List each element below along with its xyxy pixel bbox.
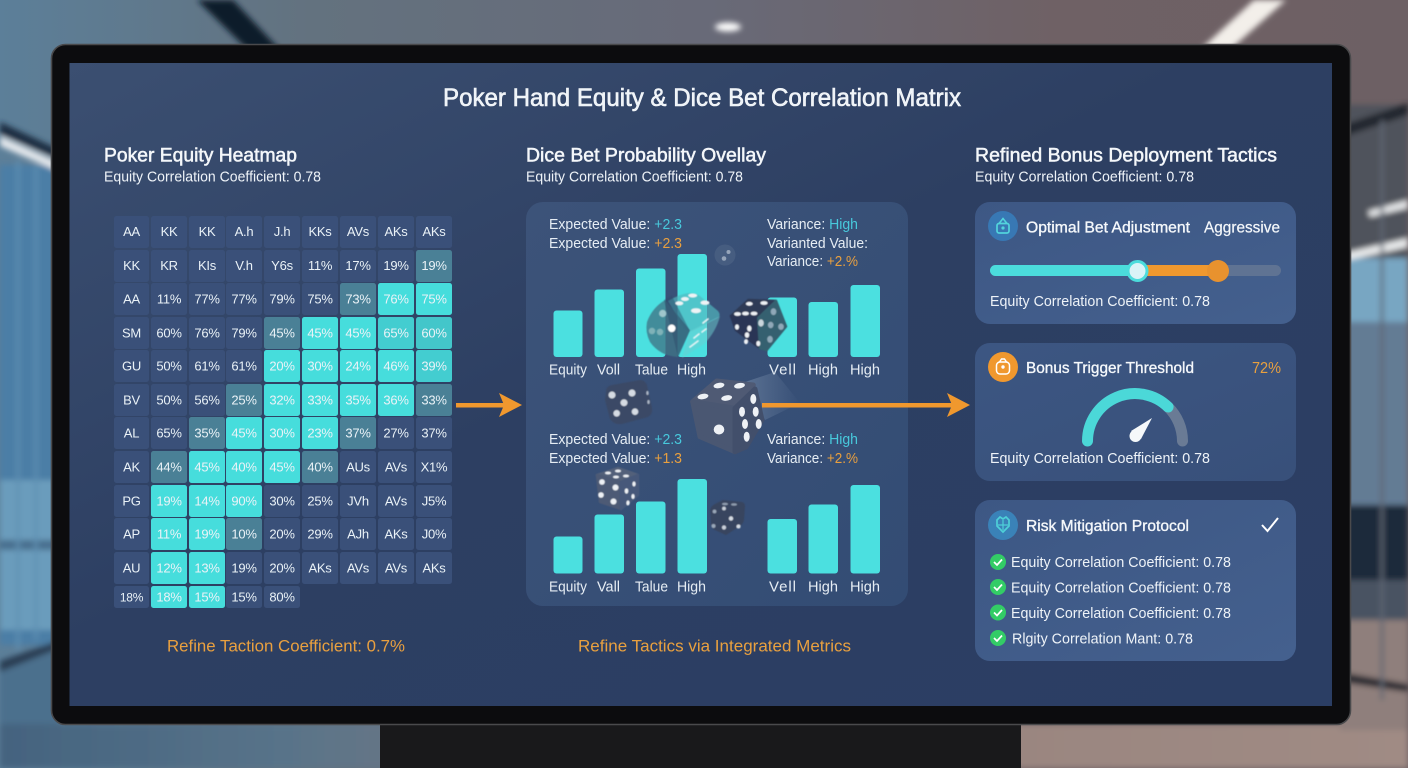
heatmap row 6: 33% — [421, 392, 447, 408]
bar chart: upper: High — [677, 362, 706, 378]
gauge — [1088, 394, 1182, 442]
heatmap row 11: AVs — [347, 560, 370, 576]
bar chart: upper: Vell — [769, 362, 796, 378]
heatmap row 6: 33% — [307, 392, 333, 408]
heatmap row 1: AVs — [347, 224, 370, 239]
bar chart: lower: High — [850, 578, 880, 596]
icon: large die with motion trail — [693, 372, 952, 452]
heatmap row 9: 90% — [231, 494, 257, 508]
heatmap row 2: 19% — [383, 258, 409, 273]
heatmap row 6: 35% — [345, 392, 371, 408]
heatmap row 7: 23% — [307, 426, 333, 440]
heatmap row 5: 30% — [307, 358, 333, 374]
heatmap row 9: 30% — [269, 494, 295, 508]
heatmap row 11: 13% — [194, 560, 220, 576]
heatmap row 12: 18% — [156, 590, 182, 604]
heatmap row 11: 19% — [231, 560, 257, 576]
heatmap row 3: 75% — [307, 292, 333, 306]
heatmap row 1: AKs — [384, 224, 408, 239]
heatmap row 10: AJh — [347, 526, 369, 542]
heatmap row 2: 19% — [421, 258, 447, 273]
arrow: heatmap to dice panel — [456, 393, 522, 417]
bar chart: lower — [549, 479, 880, 596]
metrics: lower left — [549, 431, 682, 467]
caption: refine tactics: Refine Tactics via Integrated Metrics — [578, 638, 851, 656]
heatmap row 5: 24% — [345, 358, 371, 374]
bar chart: upper: High — [850, 362, 880, 378]
heatmap row 1 — [114, 216, 452, 248]
heatmap row 11 — [114, 552, 452, 584]
heatmap row 3: 73% — [345, 292, 371, 306]
heatmap row 6: 32% — [269, 392, 295, 408]
heatmap row 6: 56% — [194, 392, 220, 408]
heatmap row 8: 44% — [156, 460, 182, 474]
heatmap row 4: 45% — [307, 326, 333, 340]
heatmap row 1: AKs — [422, 224, 446, 239]
heatmap row 6: 25% — [231, 392, 257, 408]
monitor stand — [380, 720, 1021, 768]
bar chart: lower: Vell — [769, 578, 796, 596]
heatmap row 10 — [114, 518, 452, 550]
heatmap row 8: X1% — [421, 460, 448, 474]
heatmap row 1: KK — [161, 224, 178, 239]
heatmap row 4: 76% — [194, 326, 220, 340]
heatmap row 8: AUs — [346, 460, 371, 474]
metrics: lower left: Expected Value: +1.3 — [549, 450, 682, 467]
heatmap row 10: AKs — [384, 526, 408, 542]
heatmap row 3: 75% — [421, 292, 447, 306]
heatmap row 7: 45% — [231, 426, 257, 440]
heading: dice bet probability overlay: Dice Bet Probability Ovellay — [526, 146, 767, 166]
heatmap row 8: 45% — [269, 460, 295, 474]
heatmap row 1: J.h — [274, 224, 290, 239]
heatmap row 9: PG — [122, 494, 141, 508]
heatmap row 10: 11% — [157, 526, 182, 542]
bar chart: upper: Voll — [597, 362, 620, 378]
heatmap row 6: 50% — [156, 392, 182, 408]
metrics: upper left — [549, 216, 682, 252]
caption: refine taction coefficient: Refine Taction Coefficient: 0.7% — [167, 638, 405, 656]
heatmap row 10: AP — [123, 526, 140, 542]
heatmap row 7: 37% — [421, 426, 447, 440]
panel: optimal bet adjustment: Equity Correlation Coefficient: 0.78 — [990, 293, 1210, 310]
heatmap row 12: 15% — [194, 590, 220, 604]
icon: bet chip — [988, 211, 1018, 241]
heatmap row 11: AVs — [385, 560, 408, 576]
metrics: upper left: Expected Value: +2.3 — [549, 235, 682, 252]
heatmap row 5: 50% — [156, 358, 182, 374]
arrowhead: dice panel to tactics — [947, 393, 970, 417]
heatmap row 3: AA — [123, 292, 140, 306]
heatmap row 7: 30% — [269, 426, 295, 440]
heading: refined bonus deployment tactics: Equity Correlation Coefficient: 0.78 — [975, 168, 1194, 186]
icon: bonus lock — [988, 352, 1018, 382]
heatmap row 9: 19% — [156, 494, 182, 508]
heatmap row 1: A.h — [235, 224, 253, 239]
heatmap row 9: JVh — [347, 494, 369, 508]
heatmap row 7: 27% — [383, 426, 409, 440]
panel: bonus trigger threshold: 72% — [1252, 360, 1281, 377]
heatmap row 9 — [114, 485, 452, 517]
heading: poker equity heatmap — [104, 146, 321, 186]
heatmap row 2: KR — [160, 258, 178, 273]
heatmap row 3: 79% — [269, 292, 295, 306]
bar chart: lower: High — [808, 578, 838, 596]
checklist item 2: Equity Correlation Coefficient: 0.78 — [1011, 580, 1231, 596]
heatmap row 6: 36% — [383, 392, 409, 408]
heatmap row 9: 14% — [194, 494, 220, 508]
panel: bonus trigger threshold — [975, 343, 1296, 481]
icon: dim die — [605, 380, 652, 424]
heatmap row 1: KK — [199, 224, 216, 239]
heatmap row 5: 61% — [194, 358, 220, 374]
metrics: upper right: Varianted Value: — [767, 235, 868, 252]
heatmap row 4: 45% — [269, 326, 295, 340]
heatmap row 10: J0% — [422, 526, 447, 542]
icon: die above lower chart — [597, 468, 638, 509]
heatmap row 7: AL — [124, 426, 139, 440]
metrics: lower right: Variance: High — [767, 431, 858, 448]
bar chart: upper: Equity — [549, 362, 587, 378]
panel: optimal bet adjustment: Optimal Bet Adjustment — [1026, 220, 1191, 236]
heatmap row 10: 29% — [307, 526, 333, 542]
checklist item 4: Rlgity Correlation Mant: 0.78 — [1012, 630, 1193, 648]
heatmap row 7: 37% — [345, 426, 371, 440]
heading: refined bonus deployment tactics — [975, 146, 1277, 186]
heatmap row 6 — [114, 384, 452, 416]
heatmap row 11: 20% — [269, 560, 295, 576]
panel: bonus trigger threshold: Bonus Trigger Threshold — [1026, 360, 1194, 377]
heatmap row 9: J5% — [422, 494, 447, 508]
slider — [990, 260, 1281, 282]
heading: dice bet probability overlay — [526, 146, 767, 186]
metrics: lower right: Variance: +2.% — [767, 450, 858, 467]
heatmap row 3: 77% — [194, 292, 220, 306]
heatmap row 3: 77% — [231, 292, 257, 306]
heatmap row 4: 60% — [156, 326, 182, 340]
heading: poker equity heatmap: Poker Equity Heatmap — [104, 146, 297, 166]
heatmap row 1: AA — [123, 224, 140, 239]
heatmap row 4: 79% — [231, 326, 257, 340]
bar chart: lower: Equity — [549, 578, 587, 596]
bar chart: upper: Talue — [635, 362, 668, 378]
heatmap row 2: 17% — [345, 258, 371, 273]
heatmap row 4 — [114, 317, 452, 349]
heatmap row 2 — [114, 250, 452, 282]
heatmap row 12 — [114, 586, 300, 608]
panel: poker equity heatmap grid — [114, 216, 452, 608]
panel: dice bet probability — [526, 202, 908, 606]
heatmap row 4: SM — [122, 326, 141, 340]
screen — [70, 63, 1332, 706]
heatmap row 3: 76% — [383, 292, 409, 306]
heatmap row 10: 10% — [231, 526, 257, 542]
heatmap row 2: KK — [123, 258, 140, 273]
heatmap row 4: 45% — [345, 326, 371, 340]
metrics: lower left: Expected Value: +2.3 — [549, 431, 682, 448]
icon: dark die — [731, 300, 786, 350]
metrics: upper right: Variance: High — [767, 216, 858, 233]
panel: optimal bet adjustment — [975, 202, 1296, 324]
heatmap row 8: 40% — [307, 460, 333, 474]
heatmap row 9: 25% — [307, 494, 333, 508]
heatmap row 8 — [114, 451, 452, 483]
heatmap row 11: 12% — [156, 560, 182, 576]
heatmap row 11: AKs — [308, 560, 332, 576]
heatmap row 2: Y6s — [271, 258, 294, 273]
heatmap row 5: 46% — [383, 358, 409, 374]
heatmap row 7: 35% — [194, 426, 220, 440]
metrics: upper right — [767, 216, 868, 270]
heading: refined bonus deployment tactics: Refined Bonus Deployment Tactics — [975, 146, 1277, 166]
bar chart: lower: High — [677, 578, 706, 596]
heatmap row 6: BV — [123, 392, 140, 408]
heatmap row 8: 45% — [194, 460, 220, 474]
metrics: lower right — [767, 431, 858, 467]
heatmap row 11: AU — [123, 560, 140, 576]
heatmap row 9: AVs — [385, 494, 408, 508]
heatmap row 4: 65% — [383, 326, 409, 340]
panel: risk mitigation protocol — [975, 500, 1296, 661]
checklist item 3: Equity Correlation Coefficient: 0.78 — [1011, 605, 1231, 622]
bar chart: upper — [549, 254, 880, 378]
heatmap row 4: 60% — [421, 326, 447, 340]
heatmap row 1: KKs — [308, 224, 332, 239]
icon: risk shield — [988, 510, 1018, 540]
bar chart: lower: Vall — [597, 578, 620, 596]
metrics: upper right: Variance: +2.% — [767, 253, 858, 270]
panel: optimal bet adjustment: Aggressive — [1204, 220, 1280, 236]
heatmap row 2: 11% — [308, 258, 333, 273]
title: Poker Hand Equity & Dice Bet Correlation Matrix — [443, 84, 961, 112]
heatmap row 12: 18% — [120, 590, 144, 604]
icon: faint small die — [714, 244, 736, 266]
heatmap row 5: 39% — [421, 358, 447, 374]
heatmap row 10: 20% — [269, 526, 295, 542]
heatmap row 3: 11% — [157, 292, 182, 306]
heatmap row 5: 20% — [269, 358, 295, 374]
panel: bonus trigger threshold: Equity Correlation Coefficient: 0.78 — [990, 450, 1210, 467]
icon: check mark — [1262, 518, 1278, 531]
heatmap row 2: KIs — [198, 258, 217, 273]
heatmap row 8: AVs — [385, 460, 408, 474]
bar chart: lower: Talue — [635, 578, 668, 596]
heatmap row 7 — [114, 417, 452, 449]
checklist item 1: Equity Correlation Coefficient: 0.78 — [1011, 554, 1231, 571]
bar chart: upper: High — [808, 362, 838, 378]
heatmap row 8: AK — [123, 460, 140, 474]
heatmap row 11: AKs — [422, 560, 446, 576]
heatmap row 8: 40% — [231, 460, 257, 474]
heatmap row 7: 65% — [156, 426, 182, 440]
metrics: upper left: Expected Value: +2.3 — [549, 216, 682, 233]
heatmap row 3 — [114, 283, 452, 315]
heading: dice bet probability overlay: Equity Correlation Coefficient: 0.78 — [526, 168, 743, 186]
heatmap row 5: 61% — [231, 358, 257, 374]
heading: poker equity heatmap: Equity Correlation Coefficient: 0.78 — [104, 168, 321, 186]
heatmap row 5 — [114, 350, 452, 382]
heatmap row 10: 19% — [194, 526, 220, 542]
heatmap row 2: V.h — [235, 258, 253, 273]
heatmap row 5: GU — [122, 358, 141, 374]
heatmap row 12: 15% — [231, 590, 257, 604]
panel: risk mitigation protocol: Risk Mitigation Protocol — [1026, 518, 1189, 535]
icon: translucent die — [646, 293, 720, 358]
icon: small die beside lower chart — [710, 500, 745, 535]
heatmap row 12: 80% — [269, 590, 295, 604]
